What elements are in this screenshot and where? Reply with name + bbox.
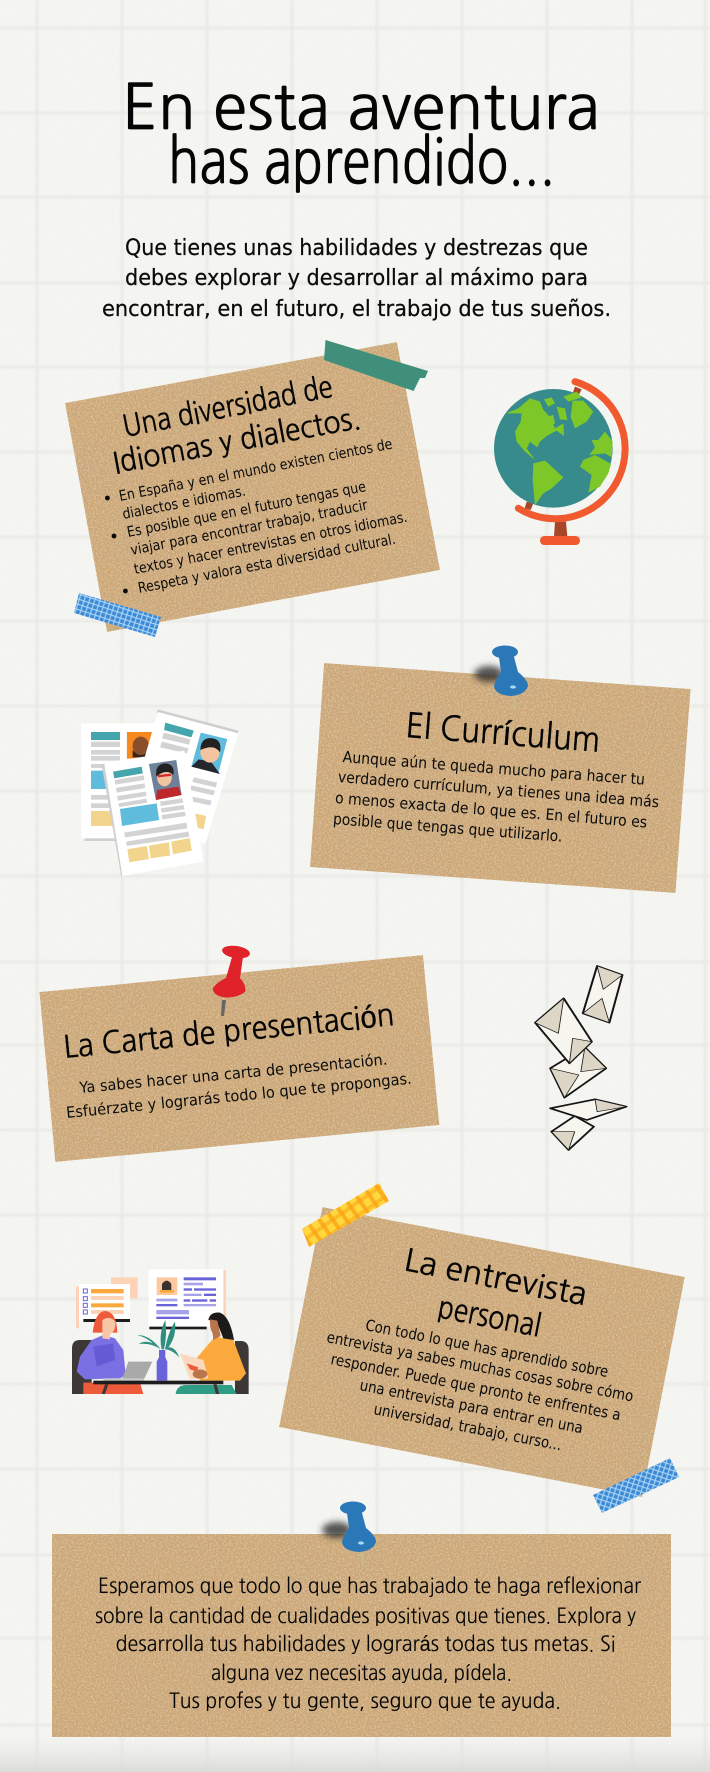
yellow checked tape bbox=[302, 1183, 389, 1247]
title: has aprendido... bbox=[168, 130, 555, 192]
icon: curriculum documents bbox=[81, 709, 238, 876]
bullet list: viajar para encontrar trabajo, traducir bbox=[129, 498, 369, 559]
bullet list: dialectos e idiomas. bbox=[121, 484, 247, 523]
closing text: alguna vez necesitas ayuda, pídela. bbox=[211, 1663, 512, 1684]
heading: carta: La Carta de presentación bbox=[62, 999, 396, 1063]
intro text bbox=[102, 236, 611, 322]
bullet list: textos y hacer entrevistas en otros idiomas. bbox=[133, 510, 409, 578]
blue checked tape bbox=[593, 1458, 679, 1513]
body text: universidad, trabajo, curso... bbox=[372, 1400, 563, 1454]
paper sheet 4 bbox=[279, 1207, 685, 1497]
green tape bbox=[324, 340, 428, 391]
closing text: desarrolla tus habilidades y lograrás todas tus metas. Si bbox=[116, 1634, 616, 1655]
bullet list: Respeta y valora esta diversidad cultural. bbox=[137, 532, 397, 597]
body text: una entrevista para entrar en una bbox=[358, 1376, 585, 1437]
body text: verdadero currículum, ya tienes una idea más bbox=[337, 768, 660, 811]
intro text: debes explorar y desarrollar al máximo para bbox=[125, 266, 588, 291]
heading: entrevista bbox=[402, 1244, 590, 1342]
paper sheet 2 bbox=[310, 663, 691, 893]
paper sheet 3 bbox=[39, 955, 439, 1162]
icon: blue pushpin bbox=[474, 646, 528, 707]
heading: el curriculum: El Currículum bbox=[405, 708, 602, 757]
closing text: Tus profes y tu gente, seguro que te ayuda. bbox=[169, 1691, 561, 1712]
panel: idiomas y dialectos bbox=[65, 340, 440, 637]
panel: la entrevista personal bbox=[279, 1183, 685, 1513]
bullet list: En España y en el mundo existen cientos de bbox=[118, 437, 394, 505]
body text bbox=[332, 748, 660, 846]
body text: Aunque aún te queda mucho para hacer tu bbox=[342, 748, 646, 789]
body text: Con todo lo que has aprendido sobre bbox=[364, 1316, 610, 1381]
body text: Ya sabes hacer una carta de presentación. bbox=[78, 1051, 388, 1097]
panel: el curriculum bbox=[310, 646, 691, 893]
icon: globe bbox=[494, 382, 625, 545]
icon: interview illustration bbox=[72, 1269, 249, 1394]
body text: entrevista ya sabes muchas cosas sobre cómo bbox=[325, 1328, 635, 1405]
body text: responder. Puede que pronto te enfrentes a bbox=[329, 1350, 622, 1424]
heading: una diversidad: Una diversidad de bbox=[120, 372, 335, 442]
bullet list: Es posible que en el futuro tengas que bbox=[126, 479, 367, 541]
closing text: sobre la cantidad de cualidades positivas que tienes. Explora y bbox=[95, 1606, 636, 1627]
intro text: Que tienes unas habilidades y destrezas que bbox=[125, 236, 588, 261]
title: En esta aventura bbox=[122, 76, 600, 138]
closing text bbox=[95, 1576, 641, 1712]
body text bbox=[325, 1316, 635, 1454]
icon: red pushpin bbox=[213, 944, 251, 1016]
bullet list bbox=[105, 437, 409, 597]
body text: Esfuérzate y lograrás todo lo que te propongas. bbox=[65, 1070, 412, 1122]
paper sheet 5 bbox=[52, 1534, 671, 1737]
paper sheet 1 bbox=[65, 342, 440, 632]
panel: la carta de presentacion bbox=[39, 944, 439, 1162]
icon: blue pushpin bbox=[322, 1502, 376, 1563]
title bbox=[122, 76, 600, 192]
intro text: encontrar, en el futuro, el trabajo de tus sueños. bbox=[102, 297, 611, 322]
heading: una diversidad: Idiomas y dialectos. bbox=[110, 403, 363, 478]
panel: closing message bbox=[52, 1502, 671, 1737]
body text: posible que tengas que utilizarlo. bbox=[332, 810, 563, 846]
body text: o menos exacta de lo que es. En el futuro es bbox=[334, 789, 648, 832]
icon: envelopes bbox=[535, 966, 626, 1150]
blue checked tape bbox=[74, 593, 161, 637]
heading: entrevista: La entrevista bbox=[402, 1244, 590, 1310]
heading: una diversidad bbox=[110, 372, 363, 478]
closing text: Esperamos que todo lo que has trabajado te haga reflexionar bbox=[98, 1576, 641, 1598]
heading: entrevista: personal bbox=[436, 1291, 544, 1342]
